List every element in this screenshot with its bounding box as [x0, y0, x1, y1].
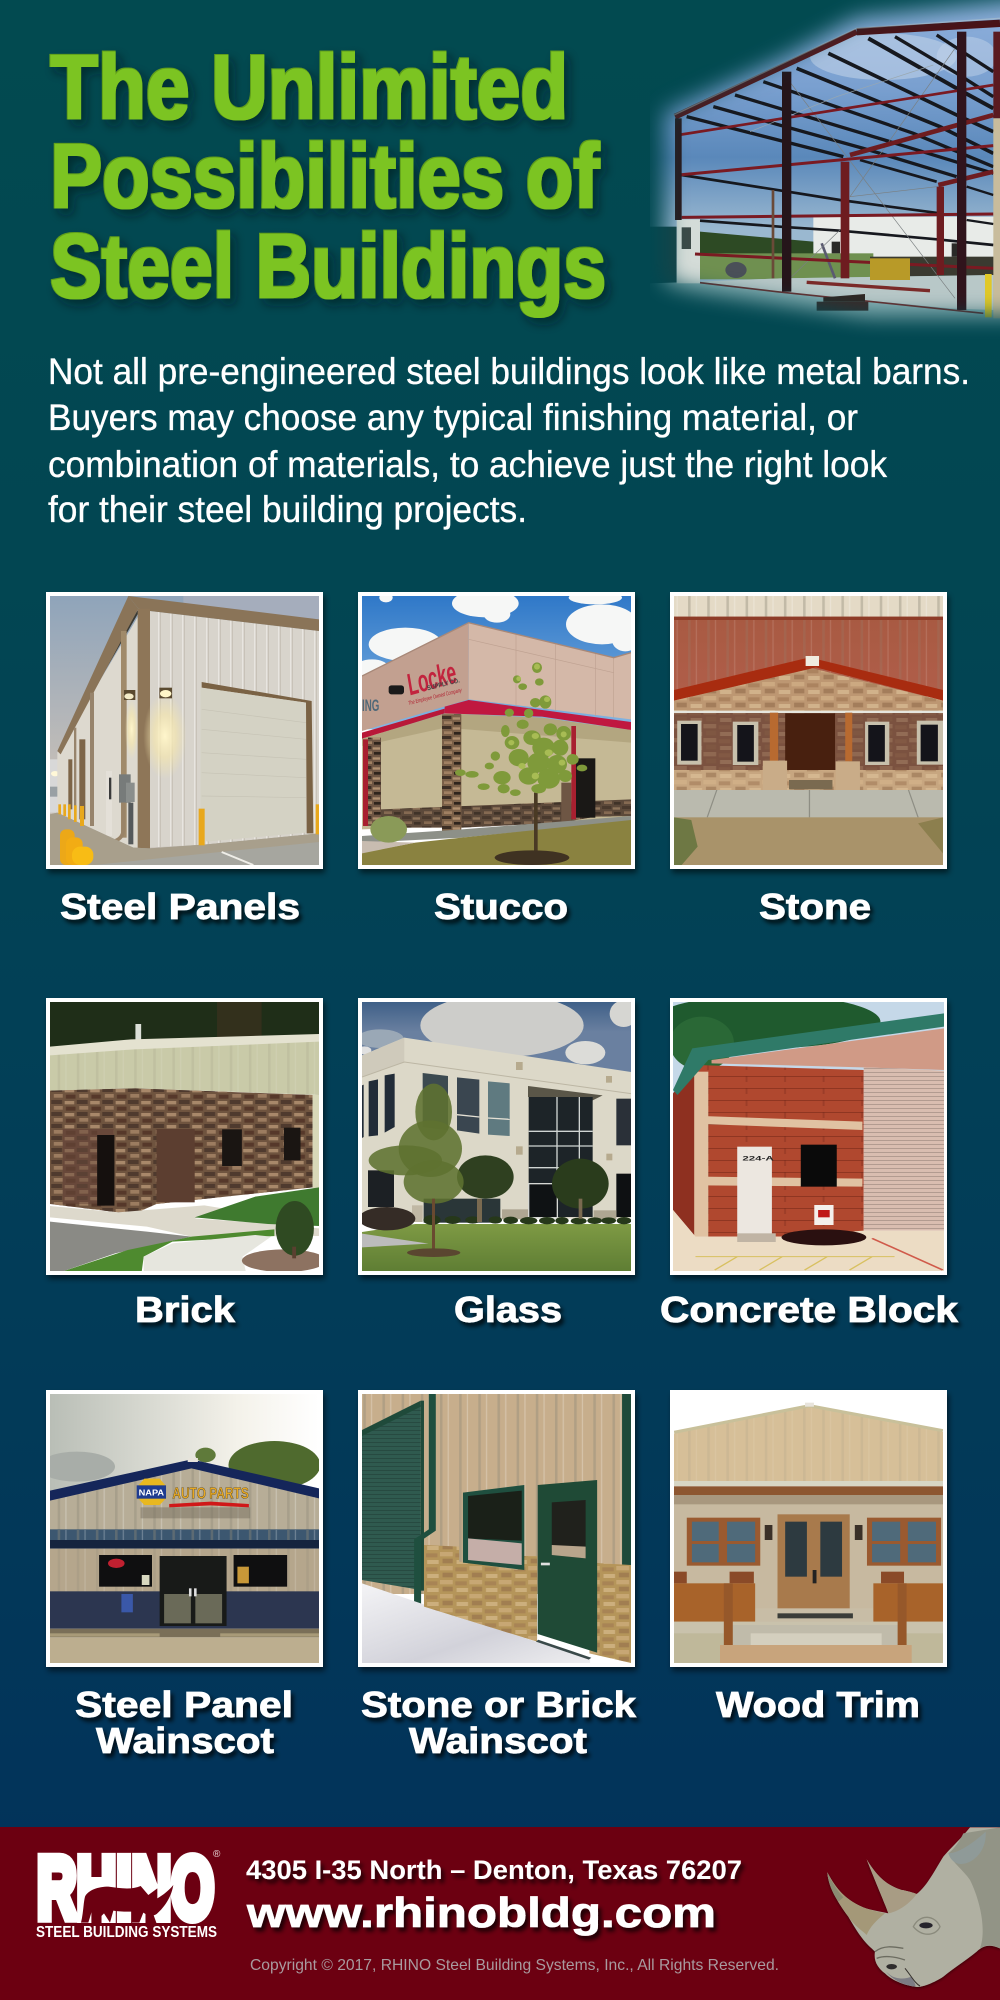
photo: steel panels building: [50, 596, 319, 865]
photo: concrete block building: [673, 1002, 944, 1271]
sign lettering: ING: [362, 696, 379, 715]
sign lettering: SUPPLY CO.: [426, 677, 461, 692]
panel: steel panel wainscot: [39, 1390, 323, 1761]
label: Stone or Brick Wainscot: Wainscot: [409, 1720, 587, 1761]
panel: stucco: [355, 589, 639, 927]
logo: RHINO Steel Building Systems: [36, 1840, 221, 1941]
address: 4305 I-35 North – Denton, Texas 76207: [246, 1855, 742, 1885]
label: Steel Panel Wainscot: Steel Panel: [75, 1684, 293, 1725]
title: Possibilities of: [50, 126, 600, 227]
title: Steel Buildings: [50, 216, 606, 317]
panel: wood trim: [670, 1390, 947, 1725]
intro text block: for their steel building projects.: [48, 489, 527, 530]
label: Glass: Glass: [454, 1289, 562, 1330]
sign lettering: [362, 656, 463, 715]
title: [50, 37, 606, 317]
panel: stone: [670, 592, 947, 927]
copyright: Copyright © 2017, RHINO Steel Building Systems, Inc., All Rights Reserved.: [250, 1957, 779, 1974]
photo: stone building: [674, 596, 943, 865]
label: Brick: Brick: [135, 1289, 236, 1330]
footer band: [0, 1827, 1000, 2000]
intro text block: [48, 351, 970, 530]
label: Steel Panel Wainscot: Wainscot: [96, 1720, 274, 1761]
panel: steel panels: [46, 592, 323, 927]
photo: auto parts store: [50, 1394, 319, 1663]
label: Stone or Brick Wainscot: Stone or Brick: [361, 1684, 637, 1725]
sign lettering: Locke: [403, 656, 460, 702]
intro text block: combination of materials, to achieve just the right look: [48, 444, 887, 485]
photo: stucco building: [362, 596, 631, 865]
sign lettering: The Employee Owned Company: [408, 688, 463, 707]
photo: building with wood trim porch: [674, 1402, 943, 1663]
logo: RHINO Steel Building Systems: ®: [213, 1849, 221, 1860]
panel: concrete block: [652, 995, 959, 1330]
label: Stone: Stone: [759, 886, 871, 927]
panel: stone or brick wainscot: [358, 1390, 637, 1761]
label: Steel Panel Wainscot: [75, 1684, 293, 1761]
label: Stone or Brick Wainscot: [361, 1684, 637, 1761]
label: Concrete Block: Concrete Block: [660, 1289, 959, 1330]
intro text block: Not all pre-engineered steel buildings look like metal barns.: [48, 351, 970, 392]
photo: steel frame under construction: [650, 0, 1000, 340]
panel: glass: [357, 994, 638, 1330]
label: Stucco: Stucco: [434, 886, 568, 927]
sign lettering: NAPA: [139, 1488, 164, 1497]
photo: tan building with stone wainscot: [362, 1394, 631, 1663]
intro text block: Buyers may choose any typical finishing material, or: [48, 397, 858, 438]
photo: glass office building: [362, 1002, 631, 1271]
panel: brick: [46, 998, 326, 1330]
website: www.rhinobldg.com: [246, 1889, 716, 1936]
title: The Unlimited: [50, 37, 568, 138]
logo: RHINO Steel Building Systems: STEEL BUILDING SYSTEMS: [36, 1924, 217, 1941]
label: Steel Panels: Steel Panels: [60, 886, 300, 927]
label: Wood Trim: Wood Trim: [716, 1684, 920, 1725]
logo: RHINO Steel Building Systems: RHINO: [37, 1840, 214, 1937]
photo: brick building: [50, 1002, 319, 1271]
icon: rhino head: [826, 1827, 1000, 1990]
photo: concrete block building: 224-A: [742, 1155, 774, 1162]
icon: rhino silhouette: [81, 1885, 174, 1923]
